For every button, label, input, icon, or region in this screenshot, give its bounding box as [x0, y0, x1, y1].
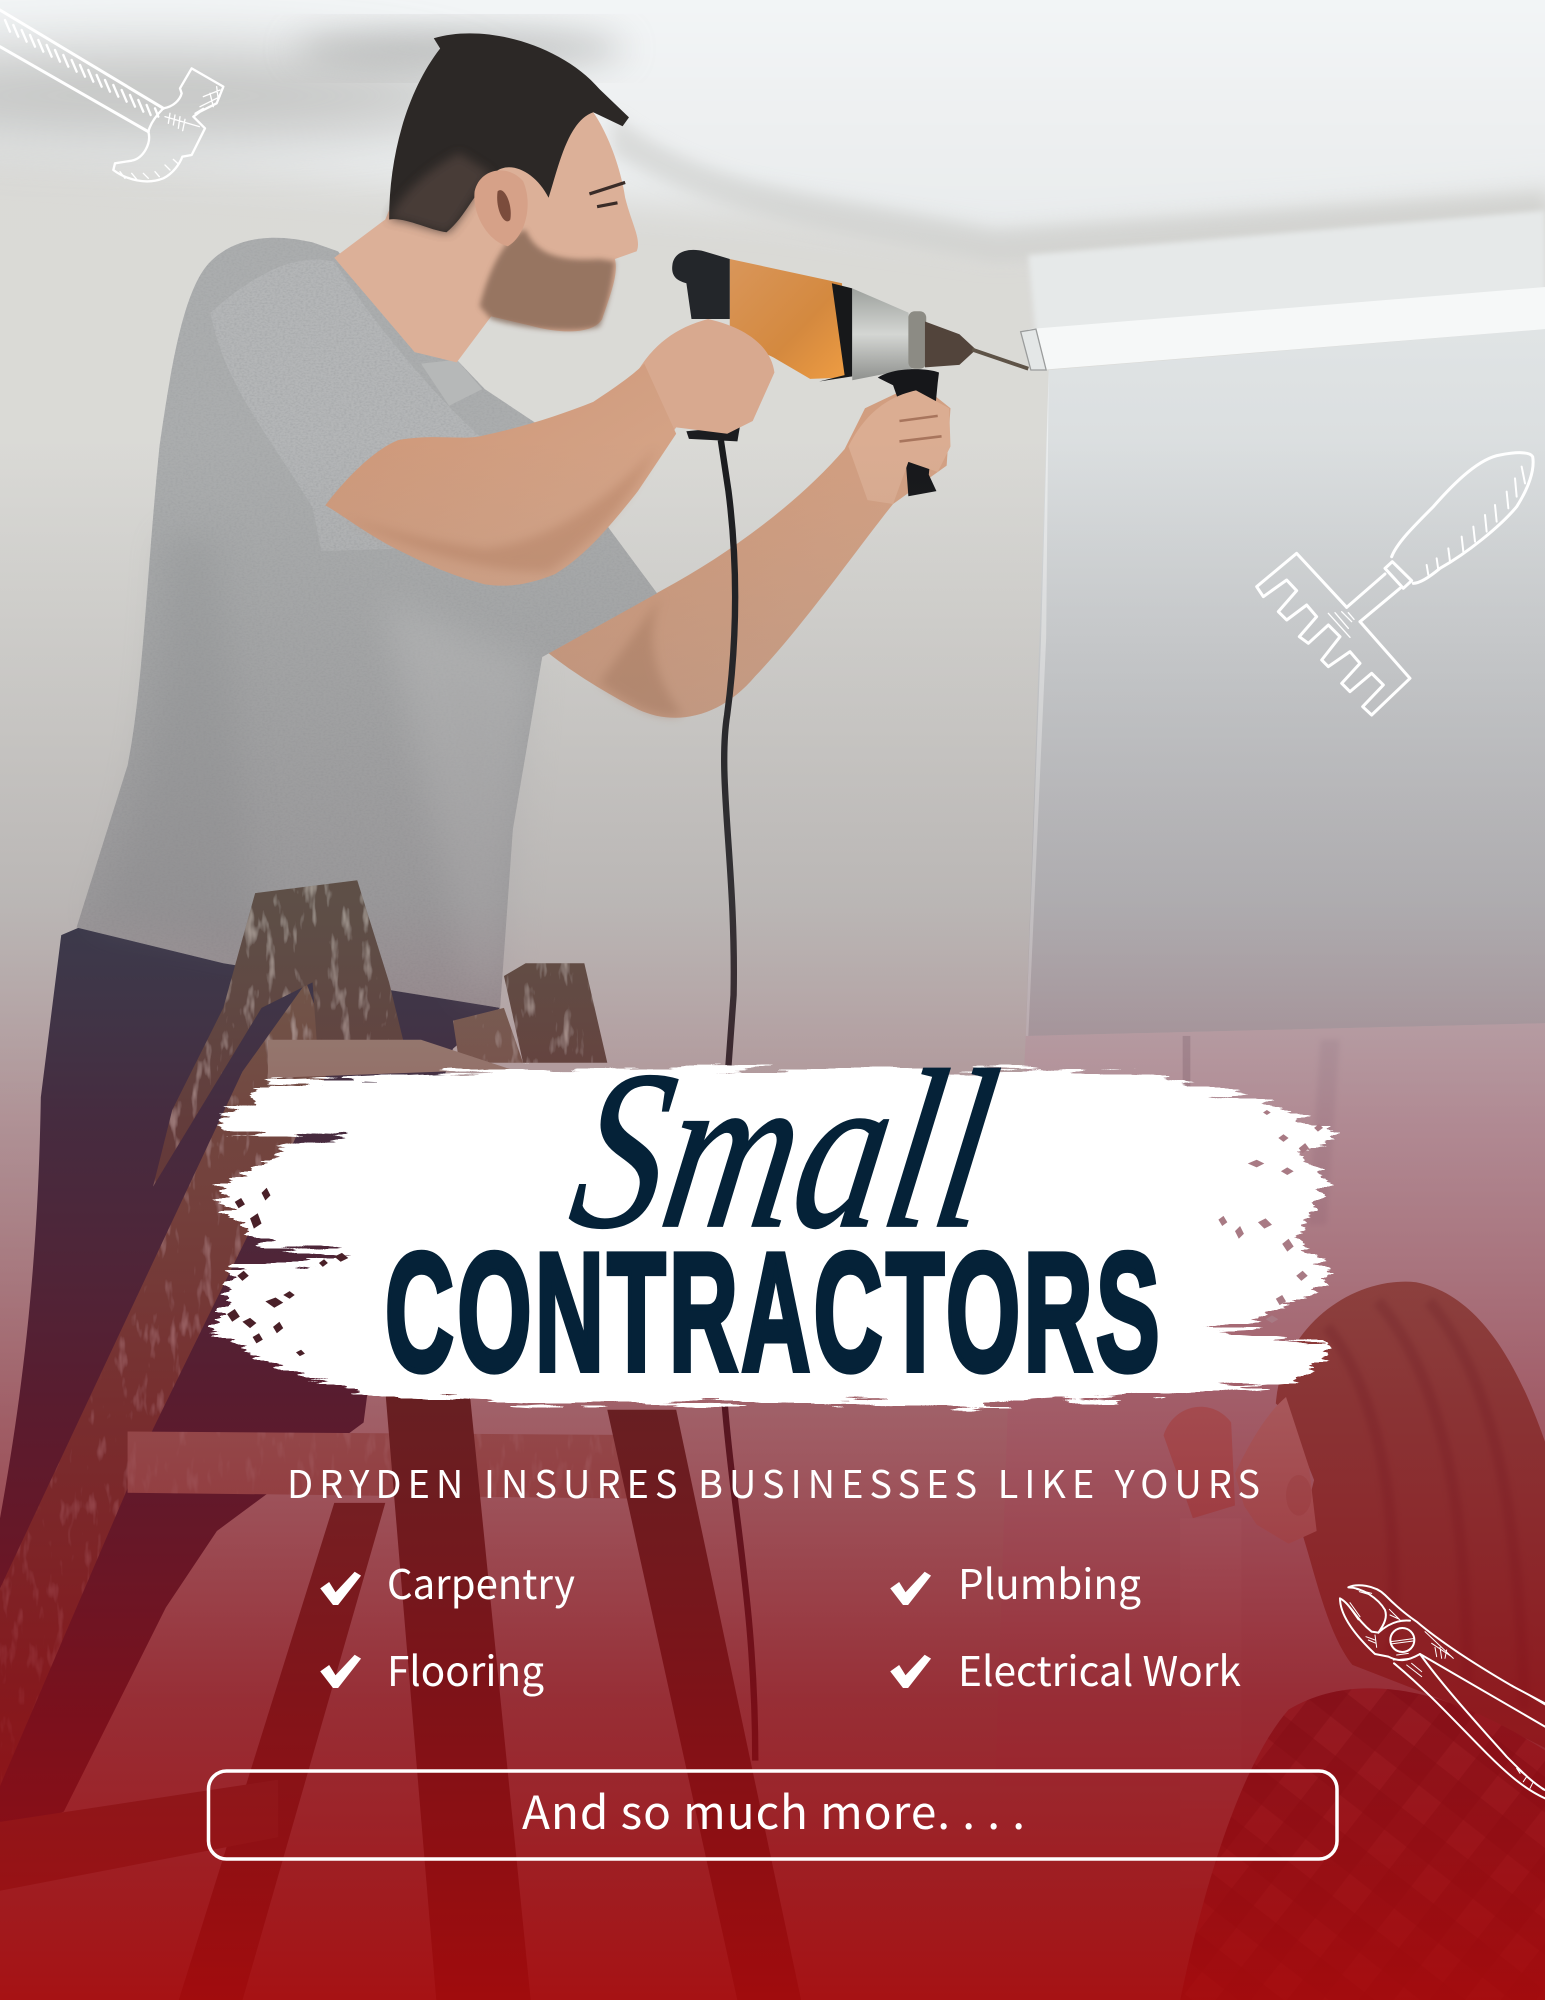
pants — [0, 928, 500, 1837]
checklist — [320, 1551, 1241, 1698]
item: Carpentry: Carpentry — [387, 1551, 575, 1611]
icon: pliers — [1340, 1585, 1545, 1798]
callout: and so much more: And so much more. . . . — [522, 1777, 1025, 1843]
shirt — [77, 238, 657, 1008]
item: Electrical Work: Electrical Work — [958, 1638, 1241, 1698]
neck and head — [334, 33, 638, 362]
item: Flooring — [320, 1638, 544, 1698]
power cord — [721, 440, 755, 1761]
arm: far forearm — [549, 383, 950, 718]
subtitle: DRYDEN INSURES BUSINESSES LIKE YOURS — [287, 1454, 1260, 1509]
item: Flooring: Flooring — [387, 1638, 544, 1698]
drill — [672, 250, 1028, 496]
ladder — [0, 880, 801, 2000]
near arm — [325, 364, 676, 586]
icon: hammer — [0, 10, 223, 181]
woman — [1164, 1282, 1545, 2000]
brush speckles — [1218, 1110, 1323, 1323]
title: Small: Small — [558, 1024, 1012, 1276]
item: Plumbing: Plumbing — [958, 1551, 1141, 1611]
callout: and so much more — [208, 1771, 1337, 1859]
roller blind — [995, 287, 1545, 1786]
banner: white brush stroke — [212, 1069, 1333, 1406]
icon: garden rake — [1257, 453, 1533, 715]
hands on drill — [625, 319, 950, 504]
